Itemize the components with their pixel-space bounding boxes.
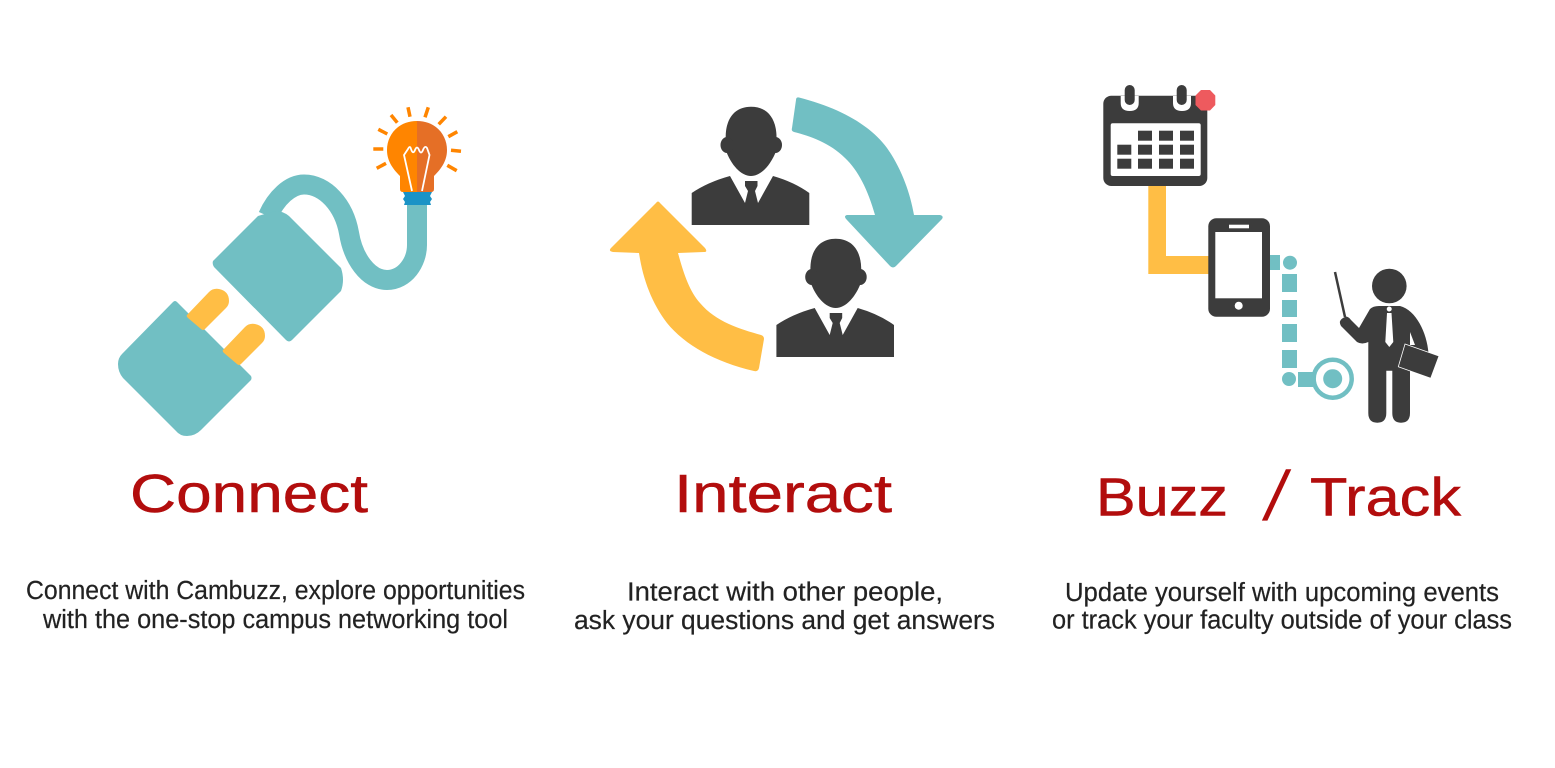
bulb socket [403, 192, 432, 205]
bulb right half [417, 121, 447, 192]
arrow: yellow [610, 202, 764, 371]
text: interact description: ask your questions and get answers [574, 607, 995, 635]
icon: people exchanging [610, 97, 943, 371]
bulb rays [373, 107, 461, 171]
icon: plug and light bulb [118, 107, 461, 436]
text: interact description: Interact with other people, [627, 578, 943, 606]
heading: buzz / track: Buzz [1096, 468, 1228, 528]
plug pin lower [223, 324, 265, 365]
connector: yellow [1148, 186, 1209, 274]
text: buzz and track description: Update yourself with upcoming events [1065, 579, 1499, 607]
calendar [1103, 85, 1207, 186]
bulb left half [387, 121, 417, 192]
arrow: teal [792, 97, 943, 268]
heading: buzz / track [1096, 457, 1462, 535]
icon: calendar, phone and teacher [1103, 85, 1439, 423]
cord [268, 184, 417, 280]
plug body [118, 301, 252, 436]
person lower [776, 239, 894, 357]
text: buzz and track description [1052, 579, 1512, 634]
target ring [1314, 360, 1352, 398]
notification dot [1196, 90, 1215, 110]
person upper [692, 107, 809, 225]
heading: interact: Interact [674, 464, 892, 524]
connector: teal dotted [1270, 255, 1313, 387]
teacher [1335, 269, 1439, 423]
socket body [213, 211, 343, 342]
panel: buzz and track [1052, 85, 1512, 634]
panel: interact [574, 97, 995, 635]
text: buzz and track description: or track your faculty outside of your class [1052, 606, 1512, 634]
heading: buzz / track: Track [1310, 468, 1462, 528]
plug pin upper [187, 289, 229, 330]
heading: connect: Connect [130, 464, 368, 524]
text: interact description [574, 578, 995, 635]
panel: connect [26, 107, 525, 634]
phone [1208, 218, 1270, 317]
text: connect description: with the one-stop campus networking tool [42, 606, 508, 634]
bulb filament [404, 147, 430, 191]
heading: buzz / track: / [1259, 457, 1294, 535]
text: connect description: Connect with Cambuzz, explore opportunities [26, 577, 525, 605]
bulb glass [387, 121, 447, 192]
text: connect description [26, 577, 525, 634]
